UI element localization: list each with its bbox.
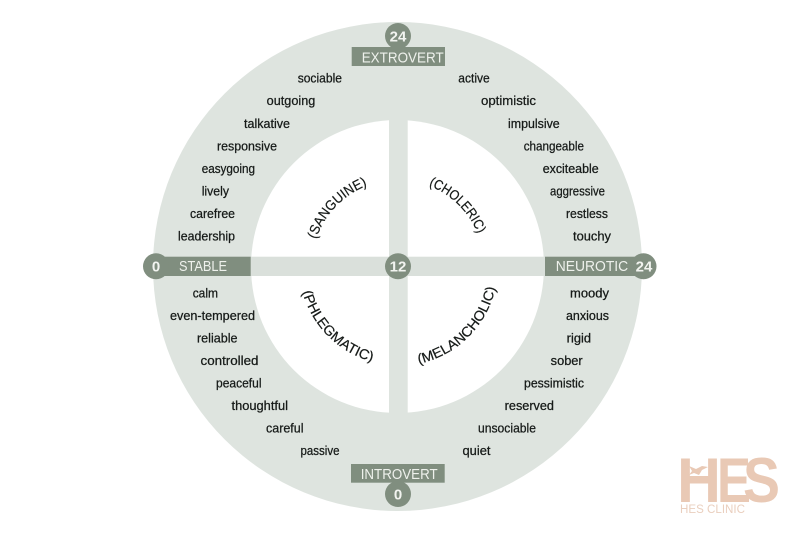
center value 12: [385, 253, 411, 279]
logo: HES Clinic: E: [717, 446, 751, 516]
traits: sanguine quadrant: [178, 72, 342, 244]
traits: sanguine quadrant: leadership: [178, 230, 235, 244]
traits: choleric quadrant: optimistic: [481, 94, 536, 108]
axis: neurotic: NEUROTIC: [556, 259, 628, 275]
traits: melancholic quadrant: quiet: [462, 444, 491, 458]
center value 12: 12: [390, 258, 406, 276]
axis: extrovert: EXTROVERT: [362, 51, 444, 67]
axis: extrovert: [352, 23, 445, 67]
traits: phlegmatic quadrant: calm: [193, 286, 218, 300]
outer disc: [153, 22, 642, 511]
icon: bird on logo: [689, 466, 708, 475]
panel: inner white circle quadrants: [250, 119, 546, 414]
curved label: melancholic: (MELANCHOLIC): [418, 287, 498, 366]
traits: melancholic quadrant: moody: [570, 286, 610, 300]
curved label: sanguine: (SANGUINE): [308, 177, 366, 238]
traits: phlegmatic quadrant: reliable: [197, 332, 238, 346]
curved label: phlegmatic: (PHLEGMATIC): [300, 291, 373, 364]
traits: phlegmatic quadrant: peaceful: [216, 377, 262, 391]
traits: choleric quadrant: active: [458, 72, 490, 86]
traits: sanguine quadrant: talkative: [244, 117, 290, 131]
axis: introvert: 0: [394, 486, 402, 504]
axis: introvert: INTROVERT: [361, 467, 438, 483]
axis: neurotic: [545, 253, 656, 279]
traits: sanguine quadrant: lively: [202, 185, 230, 199]
traits: sanguine quadrant: easygoing: [202, 162, 255, 176]
traits: choleric quadrant: touchy: [573, 230, 612, 244]
logo: HES Clinic: HES CLINIC: [680, 504, 745, 516]
traits: melancholic quadrant: [462, 286, 610, 458]
traits: phlegmatic quadrant: even-tempered: [170, 309, 255, 323]
traits: melancholic quadrant: unsociable: [478, 422, 536, 436]
curved label: choleric: (CHOLERIC): [430, 177, 486, 233]
traits: sanguine quadrant: carefree: [190, 207, 235, 221]
axis: stable: [143, 253, 251, 279]
traits: choleric quadrant: restless: [566, 207, 608, 221]
traits: choleric quadrant: changeable: [524, 140, 584, 154]
traits: melancholic quadrant: anxious: [566, 309, 609, 323]
axis: stable: 0: [152, 258, 160, 276]
axis: extrovert: 24: [390, 28, 407, 46]
logo: HES Clinic: [677, 446, 780, 516]
traits: melancholic quadrant: reserved: [505, 399, 554, 413]
axis: neurotic: 24: [636, 258, 653, 276]
traits: sanguine quadrant: responsive: [217, 140, 277, 154]
traits: sanguine quadrant: outgoing: [267, 94, 315, 108]
traits: choleric quadrant: aggressive: [550, 185, 605, 199]
logo: HES Clinic: H: [677, 446, 721, 516]
traits: sanguine quadrant: sociable: [298, 72, 342, 86]
traits: phlegmatic quadrant: thoughtful: [232, 399, 288, 413]
traits: melancholic quadrant: sober: [551, 354, 583, 368]
traits: phlegmatic quadrant: [170, 286, 340, 458]
logo: HES Clinic: S: [743, 446, 780, 516]
traits: phlegmatic quadrant: passive: [300, 444, 340, 458]
traits: choleric quadrant: impulsive: [508, 117, 560, 131]
traits: phlegmatic quadrant: controlled: [200, 354, 259, 368]
axis: stable: STABLE: [179, 259, 227, 275]
traits: phlegmatic quadrant: careful: [266, 422, 304, 436]
traits: choleric quadrant: exciteable: [543, 162, 599, 176]
traits: melancholic quadrant: pessimistic: [524, 377, 584, 391]
traits: melancholic quadrant: rigid: [567, 332, 591, 346]
axis: introvert: [351, 464, 445, 507]
traits: choleric quadrant: [458, 72, 612, 244]
